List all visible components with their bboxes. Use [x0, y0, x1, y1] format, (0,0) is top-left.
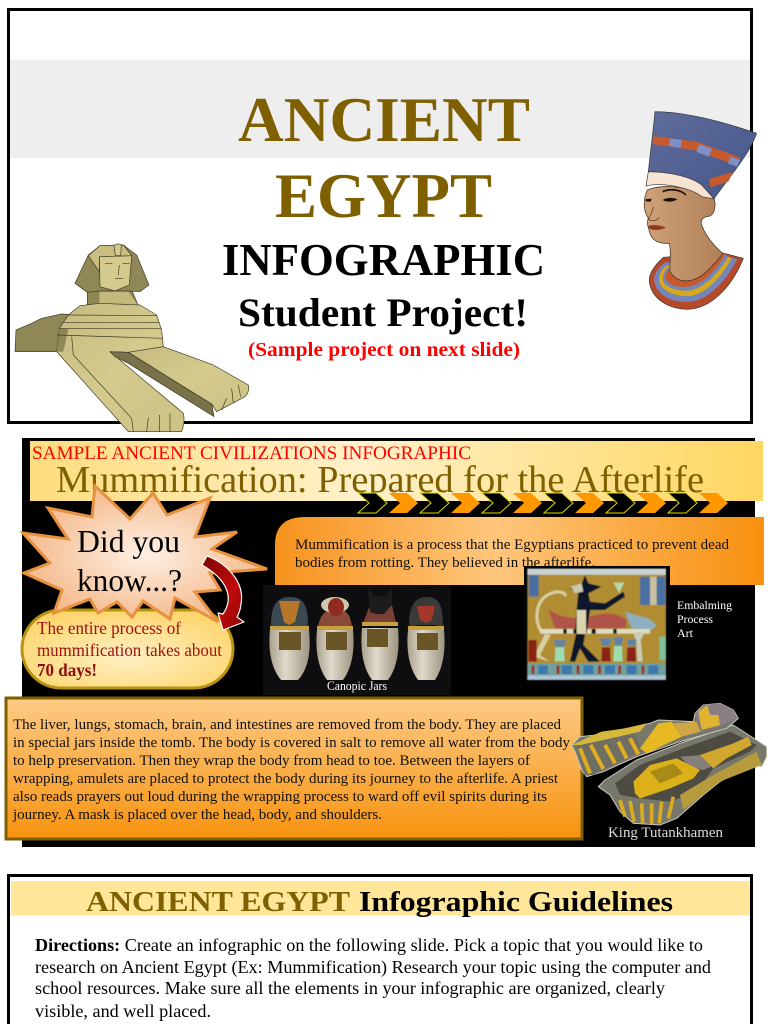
caption: King Tut: King Tutankhamen: [608, 825, 723, 841]
heading: guidelines: ANCIENT EGYPT: [86, 886, 350, 918]
directions text: visible, and well placed.: [35, 1001, 211, 1021]
process text: to help preservation. Then they wrap the body from head to toe. Between the layers of: [13, 753, 530, 769]
heading: Student Project: Student Project!: [238, 290, 528, 335]
chevron row: [358, 493, 728, 513]
starburst text: know...?: [77, 562, 182, 598]
note: sample project: (Sample project on next slide): [248, 339, 520, 361]
heading: guidelines black: Infographic Guidelines: [359, 886, 673, 918]
heading: Ancient: ANCIENT: [238, 84, 530, 155]
heading: Egypt: EGYPT: [275, 160, 492, 231]
starburst: [23, 486, 267, 622]
heading: mummification: Mummification: Prepared for the Afterlife: [56, 459, 704, 501]
jar 4: [407, 597, 445, 680]
icon: sphinx: [15, 244, 249, 432]
callout: oval text: mummification takes about: [37, 640, 222, 660]
callout: did you know oval: [22, 610, 233, 688]
callout: oval text: [37, 618, 222, 680]
intro text: [295, 537, 729, 571]
caption: embalming: [677, 598, 732, 640]
intro text: Mummification is a process that the Egyptians practiced to prevent dead: [295, 537, 729, 553]
process text: wrapping, amulets are placed to protect the body during its journey to the afterlife. A priest: [13, 771, 559, 787]
caption: canopic jars: Canopic Jars: [327, 679, 387, 693]
starburst text: Did you: [77, 523, 180, 559]
directions text: [35, 935, 711, 1021]
text panel: process: [6, 698, 582, 839]
starburst text: [77, 523, 182, 598]
jar 1: [269, 597, 310, 680]
process text: [12, 717, 570, 823]
guidelines band: [11, 881, 750, 916]
panel: guidelines: [8, 876, 752, 1024]
caption: embalming: Embalming: [677, 598, 732, 612]
caption: embalming: Process: [677, 612, 713, 626]
title band: [10, 60, 750, 158]
heading: Infographic: INFOGRAPHIC: [222, 234, 545, 285]
arrow: curved red: [202, 556, 244, 630]
caption: embalming: Art: [677, 626, 694, 640]
process text: also reads prayers out loud during the wrapping process to ward off evil spirits during its: [13, 789, 547, 805]
image: embalming art: [524, 566, 670, 682]
jar 2: [316, 597, 354, 680]
jar 3: [361, 588, 399, 680]
panel: sample infographic: [6, 438, 767, 847]
callout: oval text: The entire process of: [37, 618, 181, 638]
directions text: Directions: Create an infographic on the following slide. Pick a topic that you would like to: [35, 935, 703, 955]
intro text: bodies from rotting. They believed in the afterlife.: [295, 555, 595, 571]
panel: title slide: [8, 10, 752, 422]
process text: The liver, lungs, stomach, brain, and intestines are removed from the body. They are placed: [13, 717, 561, 733]
directions text: school resources. Make sure all the elements in your infographic are organized, clearly: [35, 978, 665, 998]
label: sample heading: SAMPLE ANCIENT CIVILIZATIONS INFOGRAPHIC: [32, 443, 471, 464]
callout: oval text: 70 days!: [37, 660, 97, 680]
process text: in special jars inside the tomb. The body is covered in salt to remove all water from the body: [13, 735, 570, 751]
orange intro banner: [275, 517, 764, 585]
title banner: [30, 441, 763, 501]
image: King Tut coffin: [572, 703, 767, 825]
icon: Nefertiti bust: [644, 112, 757, 309]
image: canopic jars: [263, 585, 451, 695]
directions text: research on Ancient Egypt (Ex: Mummification) Research your topic using the computer and: [35, 957, 711, 978]
process text: journey. A mask is placed over the head, body, and shoulders.: [12, 807, 382, 823]
